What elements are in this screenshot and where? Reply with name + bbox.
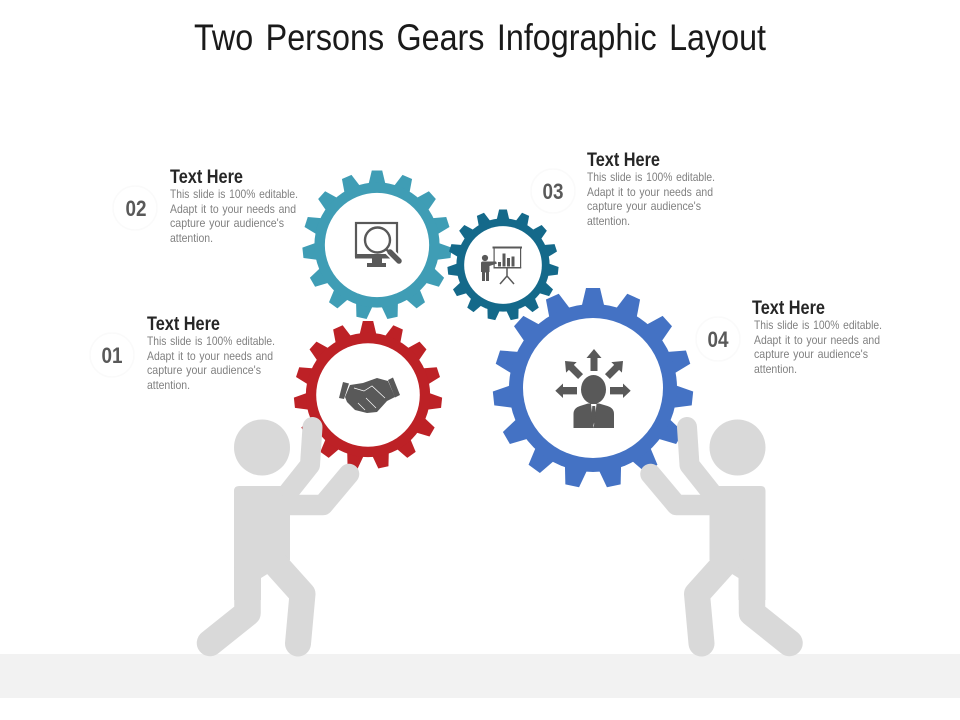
callout 04: attention.: [754, 362, 797, 376]
callout 04: This slide is 100% editable.: [754, 318, 882, 332]
ground band: [0, 654, 960, 698]
icon: person with radiating arrows: [555, 349, 631, 428]
callout 04: Text Here: [752, 297, 825, 319]
callout 01: [90, 313, 275, 392]
callout 01: 01: [102, 343, 122, 368]
callout 03: This slide is 100% editable.: [587, 170, 715, 184]
callout 02: attention.: [170, 231, 213, 245]
icon: handshake: [339, 378, 400, 413]
callout 02: [113, 166, 298, 245]
callout 02: Adapt it to your needs and: [170, 202, 296, 216]
gear: teal: [302, 170, 452, 320]
callout 01: attention.: [147, 378, 190, 392]
callout 03: capture your audience's: [587, 199, 701, 213]
callout 04: 04: [708, 327, 729, 352]
title: Two Persons Gears Infographic Layout: [194, 17, 767, 58]
callout 03: Text Here: [587, 149, 660, 171]
figure: left person: [210, 420, 349, 644]
callout 03: 03: [542, 179, 564, 204]
callout 02: This slide is 100% editable.: [170, 187, 298, 201]
icon: presenter with chart board: [481, 246, 522, 284]
callout 03: [531, 149, 715, 228]
gear: blue: [492, 288, 694, 488]
callout 02: Text Here: [170, 166, 243, 188]
figure: right person: [650, 420, 790, 644]
callout 03: attention.: [587, 214, 630, 228]
icon: monitor with magnifier: [355, 223, 401, 267]
gear: dark teal: [447, 210, 559, 321]
callout 01: This slide is 100% editable.: [147, 334, 275, 348]
callout 04: Adapt it to your needs and: [754, 333, 880, 347]
callout 01: Text Here: [147, 313, 220, 335]
callout 02: capture your audience's: [170, 216, 284, 230]
callout 04: capture your audience's: [754, 347, 868, 361]
callout 04: [696, 297, 882, 376]
callout 03: Adapt it to your needs and: [587, 185, 713, 199]
gear: red: [294, 321, 442, 469]
callout 02: 02: [126, 196, 146, 221]
callout 01: capture your audience's: [147, 363, 261, 377]
callout 01: Adapt it to your needs and: [147, 349, 273, 363]
